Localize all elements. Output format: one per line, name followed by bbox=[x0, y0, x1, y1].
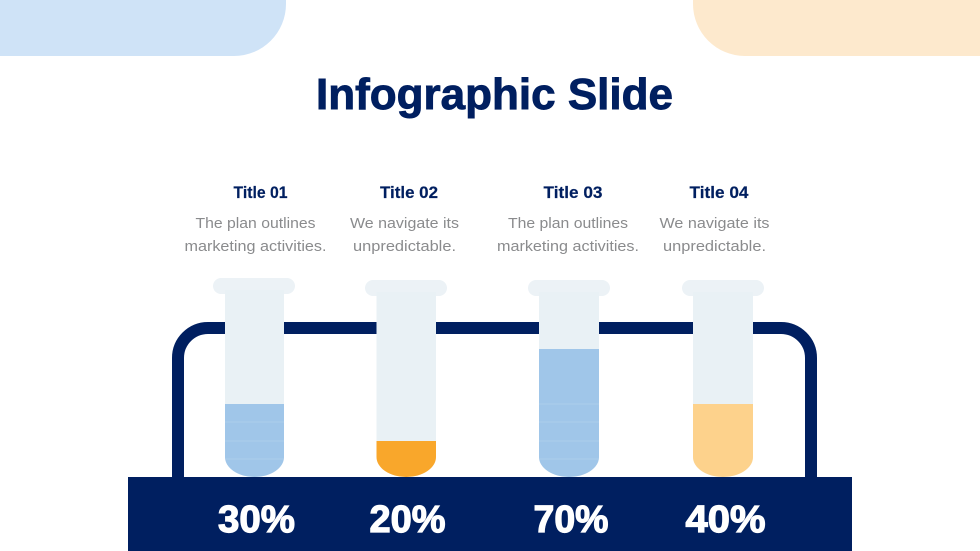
rack base bbox=[128, 477, 852, 551]
column 4 text: unpredictable. bbox=[663, 238, 766, 255]
value 70%: 70% bbox=[534, 499, 608, 541]
column 1 text: marketing activities. bbox=[184, 238, 326, 255]
rack frame bbox=[178, 328, 811, 480]
value 30%: 30% bbox=[218, 499, 295, 541]
column 2 text: Title 02 bbox=[380, 183, 438, 202]
value 40%: 40% bbox=[686, 499, 766, 541]
top right corner shape bbox=[693, 0, 980, 56]
title: Infographic Slide bbox=[316, 70, 673, 119]
column 4 text: Title 04 bbox=[690, 183, 749, 202]
column 2 text: We navigate its bbox=[350, 215, 459, 232]
test tube 2: 20% bbox=[365, 280, 447, 477]
value 20%: 20% bbox=[370, 499, 446, 541]
column 1 text: The plan outlines bbox=[196, 215, 316, 232]
column 4 text bbox=[660, 183, 770, 255]
column 1 text: Title 01 bbox=[234, 183, 288, 202]
column 2 text: unpredictable. bbox=[353, 238, 456, 255]
column 2 text bbox=[350, 183, 459, 255]
test tube 4: 40% bbox=[682, 280, 764, 477]
column 3 text bbox=[497, 183, 639, 255]
column 3 text: Title 03 bbox=[544, 183, 602, 202]
top left corner shape bbox=[0, 0, 286, 56]
column 1 text bbox=[184, 183, 326, 255]
column 4 text: We navigate its bbox=[660, 215, 770, 232]
test tube 1: 30% bbox=[213, 278, 295, 477]
test tube 3: 70% bbox=[528, 280, 610, 477]
column 3 text: The plan outlines bbox=[508, 215, 628, 232]
column 3 text: marketing activities. bbox=[497, 238, 639, 255]
